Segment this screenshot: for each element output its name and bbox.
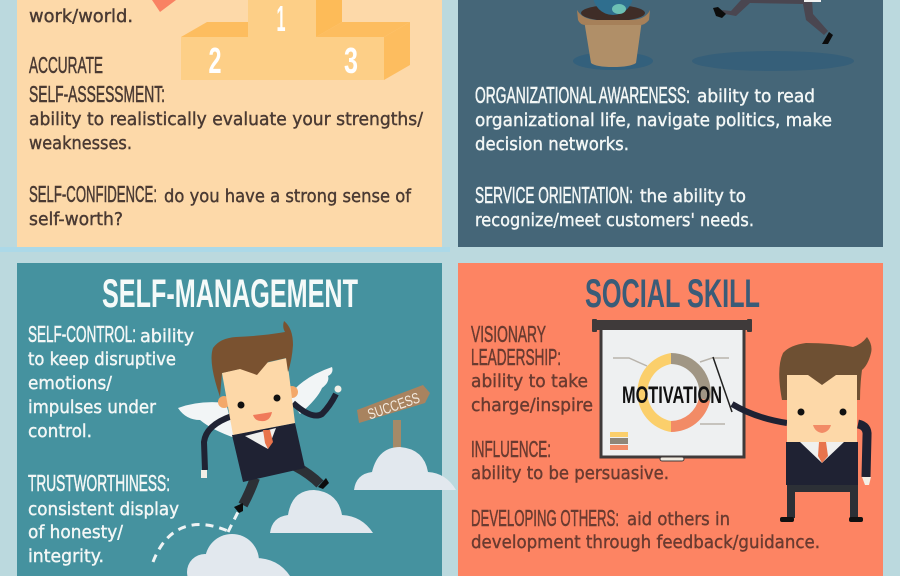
text: social skill definitions: charge/inspire — [471, 396, 593, 416]
text: self-management definitions: SELF-CONTROL: — [28, 321, 136, 347]
icon: dashed jump path — [153, 512, 238, 562]
text: social awareness definitions: decision networks. — [475, 135, 629, 155]
icon: cloud bottom — [187, 534, 290, 576]
text: social awareness definitions: the ability to — [640, 187, 746, 207]
text: social skill definitions: development through feedback/guidance. — [471, 533, 820, 553]
icon: potted globe — [573, 0, 653, 70]
panel: self-awareness — [17, 0, 442, 247]
heading: social skill: SOCIAL SKILL — [585, 272, 760, 316]
text: social awareness definitions: organizational life, navigate politics, make — [475, 111, 832, 131]
text: self-management definitions: TRUSTWORTHINESS: — [28, 470, 170, 496]
text: self-management definitions: consistent display — [28, 500, 179, 520]
icon: podium — [181, 0, 410, 81]
text: self-awareness definitions: do you have a strong sense of — [164, 187, 412, 207]
text: social skill definitions: LEADERSHIP: — [471, 344, 561, 370]
text: self-awareness definitions: self-worth? — [29, 210, 123, 230]
heading: self-management: SELF-MANAGEMENT — [102, 272, 358, 316]
text: social skill definitions: DEVELOPING OTHERS: — [471, 505, 619, 531]
chart: presentation board with motivation donut: MOTIVATION — [622, 382, 722, 409]
text: self-awareness definitions: weaknesses. — [29, 134, 132, 154]
icon: flying businessman — [178, 321, 342, 513]
text: social skill definitions: VISIONARY — [471, 321, 546, 347]
text: self-awareness definitions: SELF-ASSESSMENT: — [29, 81, 165, 107]
icon: heart fragment — [152, 0, 176, 12]
text: social skill definitions: ability to be persuasive. — [471, 464, 669, 484]
text: social skill definitions: aid others in — [627, 510, 730, 530]
icon: cloud middle — [270, 490, 373, 533]
icon: cloud with success sign — [354, 385, 456, 490]
text: social awareness definitions: ORGANIZATIONAL AWARENESS: — [475, 82, 690, 108]
chart: presentation board with motivation donut — [592, 319, 752, 461]
text: self-management definitions: integrity. — [28, 547, 104, 567]
text: self-awareness definitions — [29, 7, 423, 230]
text: self-management definitions — [28, 321, 194, 567]
text: social skill definitions — [471, 321, 820, 553]
text: self-management definitions: ability — [140, 327, 194, 347]
text: self-management definitions: to keep disruptive — [28, 350, 176, 370]
icon: running legs and shadow — [692, 0, 854, 71]
text: self-awareness definitions: ACCURATE — [29, 52, 103, 78]
text: social awareness definitions: SERVICE ORIENTATION: — [475, 182, 633, 208]
icon: presenting businessman — [713, 337, 872, 522]
icon: cloud with success sign: SUCCESS — [366, 390, 422, 423]
panel: social skill — [458, 263, 883, 576]
text: social awareness definitions: recognize/meet customers' needs. — [475, 211, 754, 231]
text: self-awareness definitions: ability to realistically evaluate your strengths/ — [29, 110, 423, 130]
text: self-management definitions: impulses under — [28, 398, 157, 418]
text: self-awareness definitions: SELF-CONFIDENCE: — [29, 181, 157, 207]
panel: social awareness — [458, 0, 883, 247]
text: social skill definitions: ability to take — [471, 372, 588, 392]
icon: podium: 3 — [344, 40, 358, 81]
panel: self-management — [17, 263, 456, 576]
text: social skill definitions: INFLUENCE: — [471, 436, 551, 462]
text: self-management definitions: emotions/ — [28, 374, 112, 394]
icon: podium: 2 — [208, 40, 222, 81]
text: social awareness definitions: ability to read — [697, 87, 815, 107]
text: self-awareness definitions: work/world. — [29, 7, 133, 27]
text: self-management definitions: control. — [28, 422, 92, 442]
text: self-management definitions: of honesty/ — [28, 523, 123, 543]
text: social awareness definitions — [475, 82, 832, 231]
